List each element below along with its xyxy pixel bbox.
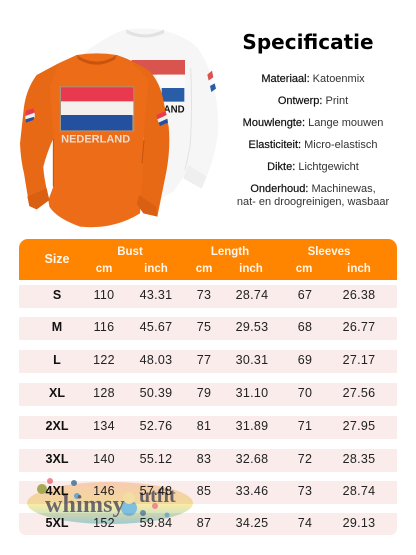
row 4XL [19, 481, 397, 504]
row L: 69 [298, 353, 312, 367]
size table [19, 239, 397, 280]
row 5XL: 5XL [46, 516, 68, 530]
row 4XL: 33.46 [236, 484, 268, 498]
row S: 28.74 [236, 288, 268, 302]
row M: 29.53 [236, 320, 268, 334]
table header [19, 239, 397, 280]
row M [19, 317, 397, 340]
row M: 116 [94, 320, 114, 334]
watermark: whimsy outfit logo [27, 478, 193, 524]
spec: design: Ontwerp: Print [278, 95, 348, 107]
spec: material: Materiaal: Katoenmix [261, 73, 365, 85]
row 5XL: 34.25 [236, 516, 268, 530]
watermark: whimsy outfit logo: utfit [139, 485, 176, 507]
header: bust inch: inch [144, 263, 168, 275]
row S: S [53, 288, 61, 302]
row 5XL: 29.13 [343, 516, 375, 530]
row 3XL [19, 449, 397, 472]
row XL: 79 [197, 386, 211, 400]
row 2XL: 31.89 [236, 419, 268, 433]
header: sleeves cm: cm [296, 263, 312, 275]
row 3XL: 140 [93, 452, 115, 466]
row 4XL: 57.48 [140, 484, 172, 498]
row XL [19, 383, 397, 406]
header: bust: Bust [117, 246, 143, 258]
row 4XL: 85 [197, 484, 211, 498]
row 5XL: 87 [197, 516, 211, 530]
row 2XL: 134 [93, 419, 115, 433]
row L: 30.31 [236, 353, 268, 367]
row L: 27.17 [343, 353, 375, 367]
row 2XL: 52.76 [140, 419, 172, 433]
row L: 122 [93, 353, 115, 367]
title: Specificatie [242, 30, 374, 54]
row 2XL: 27.95 [343, 419, 375, 433]
row S: 110 [94, 288, 114, 302]
row 3XL: 72 [298, 452, 312, 466]
row M: 68 [298, 320, 312, 334]
header: length cm: cm [196, 263, 212, 275]
row S [19, 285, 397, 308]
row 3XL: 3XL [46, 452, 68, 466]
row L: L [53, 353, 61, 367]
row L: 48.03 [140, 353, 172, 367]
row M: 75 [197, 320, 211, 334]
row S: 67 [298, 288, 312, 302]
row 3XL: 83 [197, 452, 211, 466]
spec: care: nat- en droogreinigen, wasbaar [237, 196, 389, 208]
row M: 45.67 [140, 320, 172, 334]
row 3XL: 28.35 [343, 452, 375, 466]
row 3XL: 32.68 [236, 452, 268, 466]
row XL: 128 [93, 386, 115, 400]
row L [19, 350, 397, 373]
header: sleeves inch: inch [347, 263, 371, 275]
row S: 73 [197, 288, 211, 302]
row 5XL [19, 513, 397, 535]
row 4XL: 28.74 [343, 484, 375, 498]
header: sleeves: Sleeves [308, 246, 350, 258]
header: bust cm: cm [96, 263, 112, 275]
row 2XL: 81 [197, 419, 211, 433]
row L: 77 [197, 353, 211, 367]
row 2XL: 2XL [46, 419, 68, 433]
row XL: 70 [298, 386, 312, 400]
row 4XL: 146 [93, 484, 115, 498]
spec: thickness: Dikte: Lichtgewicht [267, 161, 359, 173]
spec: elasticity: Elasticiteit: Micro-elastisch [248, 139, 377, 151]
row XL: 27.56 [343, 386, 375, 400]
watermark: whimsy outfit logo: whimsy [45, 492, 125, 518]
white sweater [83, 28, 218, 199]
row M: 26.77 [343, 320, 375, 334]
specification list [237, 73, 389, 208]
row M: M [52, 320, 62, 334]
row 4XL: 4XL [46, 484, 68, 498]
row XL: 31.10 [236, 386, 268, 400]
row 4XL: 73 [298, 484, 312, 498]
row 2XL [19, 416, 397, 439]
spec: care [237, 183, 389, 208]
row 5XL: 59.84 [140, 516, 172, 530]
row S: 43.31 [140, 288, 172, 302]
row S: 26.38 [343, 288, 375, 302]
header: size: Size [44, 252, 70, 266]
header: length inch: inch [239, 263, 263, 275]
spec: care: Onderhoud: Machinewas, [250, 183, 376, 195]
orange sweater [20, 53, 169, 227]
row 5XL: 74 [298, 516, 312, 530]
row XL: 50.39 [140, 386, 172, 400]
row 2XL: 71 [298, 419, 312, 433]
row XL: XL [49, 386, 65, 400]
product illustration: two Nederland sweaters [20, 28, 218, 228]
orange sweater: NEDERLAND [61, 134, 130, 146]
header: length: Length [211, 246, 249, 258]
spec: sleeve length: Mouwlengte: Lange mouwen [243, 117, 383, 129]
row 5XL: 152 [93, 516, 115, 530]
row 3XL: 55.12 [140, 452, 172, 466]
white sweater: AND [164, 105, 185, 116]
